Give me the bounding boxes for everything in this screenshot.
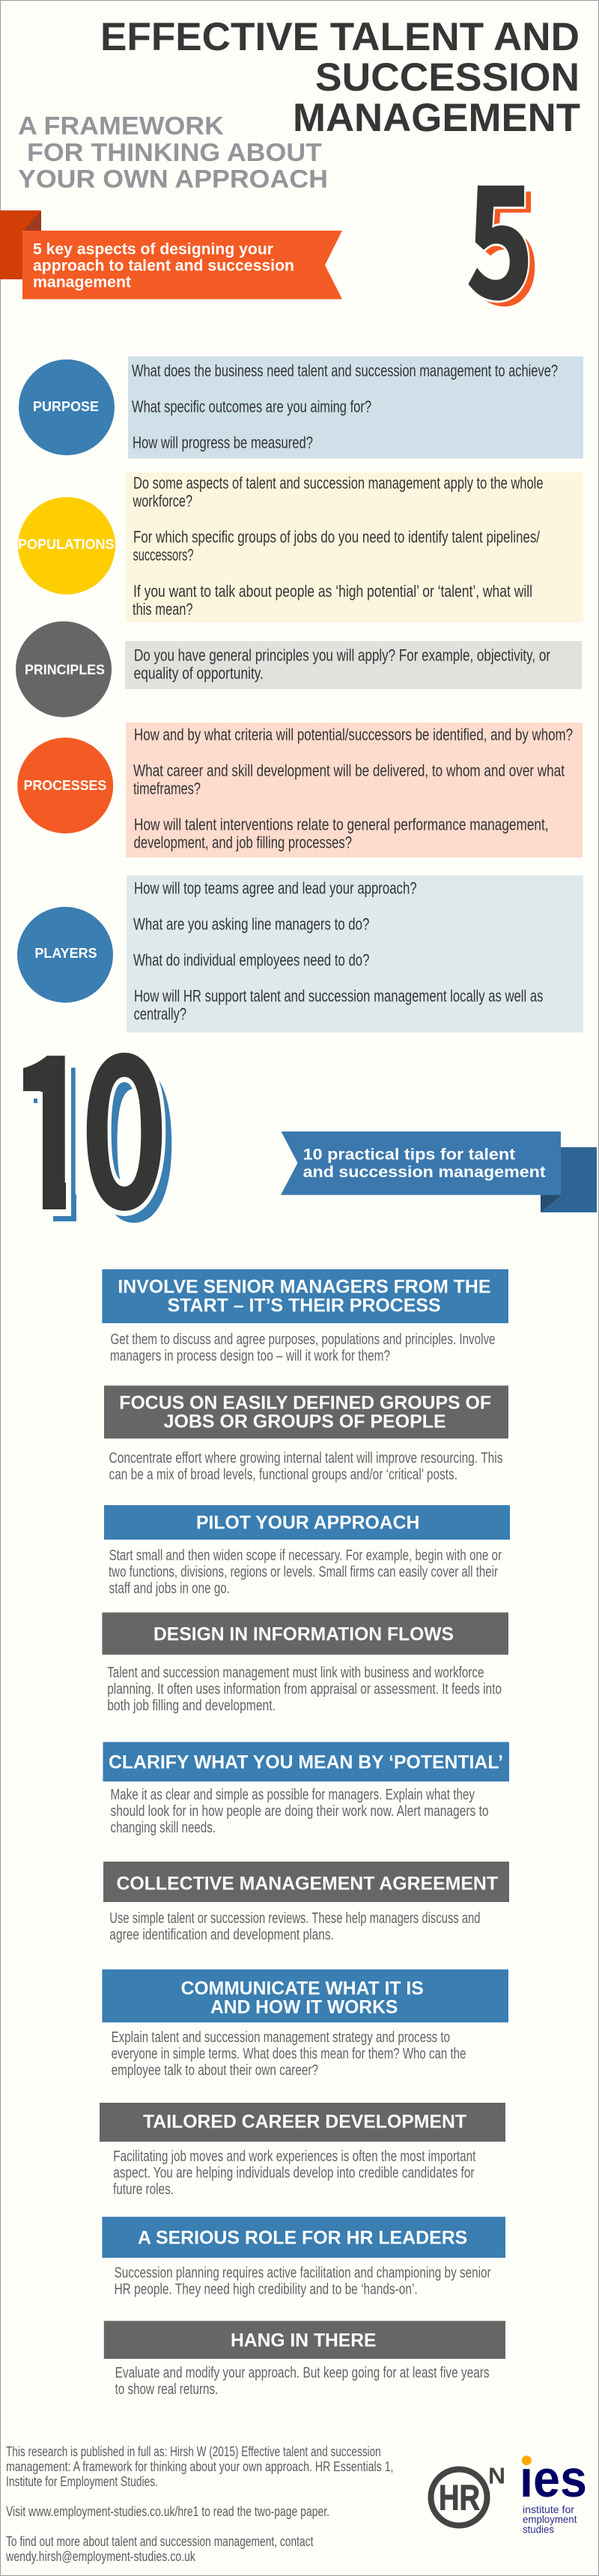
tip 10 text: Evaluate and modify your approach. But keep going for at least five years [115, 2365, 490, 2381]
tip 5 heading [103, 1742, 509, 1781]
circle: processes: PROCESSES [24, 778, 106, 793]
circle: purpose [19, 359, 115, 455]
questions: players: What are you asking line managers to do? [133, 915, 369, 934]
circle: players [17, 907, 113, 1003]
questions: populations: workforce? [133, 492, 192, 511]
tip 7 heading: AND HOW IT WORKS [210, 1996, 398, 2017]
tip 5 text [111, 1787, 489, 1836]
ribbon: 10 practical tips: and succession management [303, 1164, 546, 1181]
questions: players: centrally? [134, 1005, 186, 1024]
footer text: To find out more about talent and succession management, contact [6, 2534, 313, 2549]
tip 6 heading [103, 1862, 509, 1902]
tip 10 text [115, 2365, 490, 2398]
circle: populations [18, 497, 115, 595]
tip 6 text: agree identification and development plans. [109, 1927, 334, 1943]
panel: processes [17, 723, 583, 857]
ribbon: 10 practical tips: 10 practical tips for talent [303, 1146, 515, 1164]
panel: players [17, 875, 583, 1033]
tip 1 text [110, 1331, 496, 1364]
footer text: This research is published in full as: Hirsh W (2015) Effective talent and succession [6, 2444, 381, 2459]
tip 3 [104, 1505, 510, 1597]
tip 7 text: Explain talent and succession management strategy and process to [112, 2029, 450, 2046]
tip 10 heading [104, 2321, 505, 2359]
big number 5: 5 [473, 125, 541, 347]
title: EFFECTIVE TALENT AND [100, 15, 580, 59]
questions: players: How will top teams agree and lead your approach? [134, 879, 417, 898]
tip 10 heading: HANG IN THERE [231, 2330, 376, 2351]
title [100, 15, 580, 140]
circle: players: PLAYERS [34, 946, 97, 961]
subtitle: A FRAMEWORK [18, 112, 224, 141]
tip 7 heading [102, 1969, 508, 2023]
subtitle: FOR THINKING ABOUT [27, 139, 322, 167]
title: SUCCESSION [315, 55, 580, 100]
tip 4 text [107, 1665, 502, 1714]
tip 7 text: everyone in simple terms. What does this mean for them? Who can the [112, 2046, 466, 2062]
questions: processes: timeframes? [133, 780, 201, 798]
circle: purpose: PURPOSE [33, 399, 99, 414]
tip 3 text: staff and jobs in one go. [109, 1580, 230, 1597]
ribbon: 5 key aspects: approach to talent and succession [33, 258, 294, 275]
ribbon: 5 key aspects: 5 key aspects of designing your [33, 241, 273, 258]
questions: principles: equality of opportunity. [134, 664, 264, 683]
tip 8 [100, 2103, 505, 2198]
logo: ies: ies [520, 2449, 587, 2508]
tip 2 text: can be a mix of broad levels, functional groups and/or ‘critical’ posts. [109, 1466, 457, 1483]
tip 4 [102, 1612, 508, 1714]
big number 10: 0 [80, 964, 168, 1269]
tip 1 text: managers in process design too – will it work for them? [110, 1348, 390, 1364]
tip 1 [102, 1269, 508, 1364]
circle: principles: PRINCIPLES [25, 663, 105, 678]
tip 6 heading: COLLECTIVE MANAGEMENT AGREEMENT [117, 1873, 498, 1894]
tip 3 text [109, 1547, 502, 1597]
tip 8 text: aspect. You are helping individuals develop into credible candidates for [113, 2165, 475, 2181]
questions: principles [125, 641, 582, 689]
questions: processes: development, and job filling processes? [134, 833, 352, 852]
tip 9 text: HR people. They need high credibility and to be ‘hands-on’. [114, 2281, 418, 2297]
logo: ies: institute for [523, 2503, 574, 2515]
questions: processes [126, 723, 583, 857]
questions: players [127, 875, 583, 1033]
tip 9 text: Succession planning requires active facilitation and championing by senior [114, 2264, 491, 2281]
circle: processes [17, 738, 113, 833]
questions: populations: this mean? [133, 600, 193, 619]
tip 10 [104, 2321, 505, 2398]
tip 2 heading [104, 1385, 508, 1439]
tip 8 heading [100, 2103, 505, 2142]
tip 6 [103, 1862, 509, 1943]
tip 2 [104, 1385, 508, 1483]
tip 1 heading: START – IT’S THEIR PROCESS [168, 1295, 441, 1316]
ribbon: 5 key aspects [0, 210, 342, 300]
tip 5 text: Make it as clear and simple as possible for managers. Explain what they [111, 1787, 475, 1803]
questions: players: What do individual employees need to do? [133, 951, 369, 970]
panel: purpose [19, 356, 583, 458]
circle: populations: POPULATIONS [18, 537, 114, 552]
questions: purpose: How will progress be measured? [133, 434, 313, 452]
tip 2 heading: JOBS OR GROUPS OF PEOPLE [164, 1412, 446, 1433]
questions: purpose [128, 356, 583, 458]
tip 5 text: changing skill needs. [111, 1820, 216, 1836]
tip 2 text [109, 1450, 503, 1483]
tip 8 text [113, 2148, 476, 2198]
tip 4 text: both job filling and development. [107, 1698, 276, 1714]
tip 9 [102, 2217, 505, 2297]
tip 7 text [112, 2029, 466, 2079]
tip 4 heading: DESIGN IN INFORMATION FLOWS [153, 1624, 454, 1645]
subtitle [18, 112, 328, 194]
logo: ies [520, 2449, 587, 2536]
subtitle: YOUR OWN APPROACH [18, 165, 328, 194]
logo: HRN: N [488, 2463, 505, 2489]
tip 8 text: Facilitating job moves and work experiences is often the most important [113, 2148, 476, 2165]
tip 2 heading: FOCUS ON EASILY DEFINED GROUPS OF [119, 1393, 491, 1414]
footer text: management: A framework for thinking about your own approach. HR Essentials 1, [6, 2459, 394, 2474]
questions: populations: successors? [133, 546, 193, 565]
big number 10: 1 [15, 976, 105, 1282]
tip 6 text: Use simple talent or succession reviews. These help managers discuss and [109, 1910, 481, 1927]
tip 1 heading [102, 1269, 508, 1323]
questions: purpose: What specific outcomes are you aiming for? [132, 398, 371, 416]
logo: HRN [431, 2463, 505, 2525]
panel: principles [16, 622, 582, 717]
logo: HRN: HR [439, 2478, 480, 2518]
circle: principles [16, 622, 112, 717]
ribbon: 10 practical tips [281, 1131, 597, 1212]
tip 5 heading: CLARIFY WHAT YOU MEAN BY ‘POTENTIAL’ [109, 1752, 503, 1773]
big number 5: 5 [466, 119, 534, 341]
panel: populations [18, 473, 583, 622]
tip 4 text: Talent and succession management must link with business and workforce [107, 1665, 484, 1681]
tip 4 heading [102, 1612, 508, 1655]
footer text [5, 2444, 393, 2564]
footer text: wendy.hirsh@employment-studies.co.uk [5, 2549, 196, 2564]
tip 3 heading: PILOT YOUR APPROACH [196, 1513, 419, 1534]
tip 9 text [114, 2264, 491, 2297]
title: MANAGEMENT [293, 96, 580, 140]
big number 10 [23, 1053, 172, 1223]
logo: ies: employment [523, 2513, 577, 2525]
tip 6 text [109, 1910, 481, 1943]
ribbon: 5 key aspects: management [33, 274, 131, 291]
tip 5 text: should look for in how people are doing their work now. Alert managers to [111, 1803, 489, 1820]
big number 5: 5 [466, 119, 534, 341]
tip 10 text: to show real returns. [115, 2381, 218, 2398]
tip 8 text: future roles. [113, 2181, 174, 2198]
questions: populations [126, 473, 583, 622]
tip 7 [102, 1969, 508, 2079]
big number 10: 0 [90, 976, 178, 1281]
tip 8 heading: TAILORED CAREER DEVELOPMENT [143, 2112, 466, 2133]
tip 5 [103, 1742, 509, 1836]
logo: ies: studies [523, 2524, 554, 2536]
tip 9 heading [102, 2217, 505, 2258]
tip 7 text: employee talk to about their own career? [112, 2062, 318, 2079]
tip 9 heading: A SERIOUS ROLE FOR HR LEADERS [138, 2228, 467, 2249]
tip 3 heading [104, 1505, 510, 1540]
footer text: Institute for Employment Studies. [6, 2474, 158, 2489]
tip 1 heading: INVOLVE SENIOR MANAGERS FROM THE [118, 1277, 490, 1298]
big number 10: 1 [4, 965, 94, 1270]
footer text: Visit www.employment-studies.co.uk/hre1 to read the two-page paper. [6, 2504, 329, 2519]
tip 7 heading: COMMUNICATE WHAT IT IS [181, 1978, 424, 1999]
